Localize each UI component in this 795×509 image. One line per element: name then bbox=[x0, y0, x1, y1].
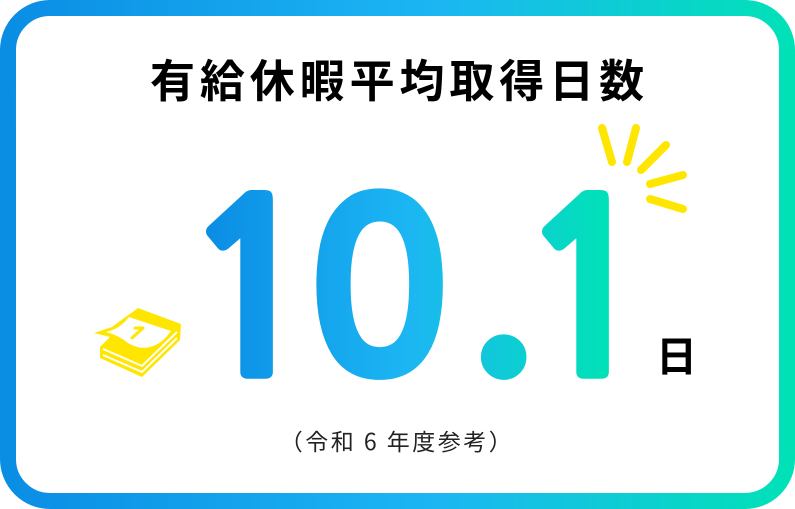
icon: sparkle rays bbox=[602, 128, 683, 209]
note: （令和 6 年度参考） bbox=[280, 423, 514, 457]
big number: 1 bbox=[515, 174, 660, 410]
big number bbox=[179, 148, 660, 410]
title: 有給休暇平均取得日数 bbox=[150, 45, 649, 110]
icon: calendar bbox=[94, 308, 181, 377]
big number: 0 bbox=[306, 174, 451, 410]
big number: . bbox=[464, 148, 540, 398]
big number: 1 bbox=[179, 174, 324, 410]
unit: 日 bbox=[656, 323, 697, 383]
